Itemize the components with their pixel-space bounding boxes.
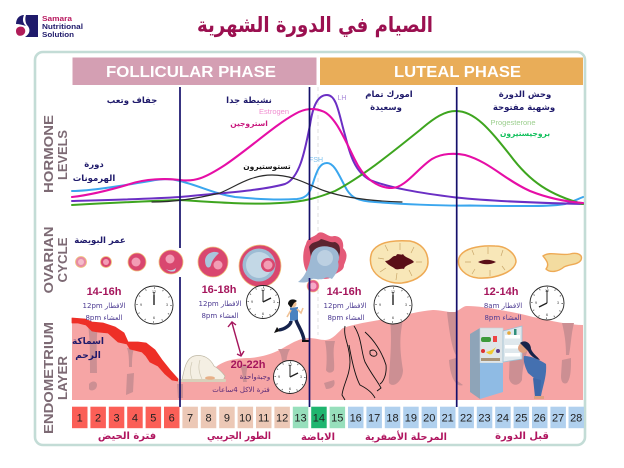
day strip: 13 [294, 412, 307, 424]
hormone and mood labels [72, 90, 555, 361]
clock: 8:00 [530, 286, 564, 320]
fasting window: late luteal: العشاء 8pm [484, 314, 522, 322]
hormone and mood labels: وحش الدورة [499, 90, 551, 100]
clock: 8:00: 9 [535, 301, 537, 305]
hormone and mood labels: بروجيستيرون [500, 129, 550, 138]
hormone and mood labels: وشهية مفتوحة [493, 103, 555, 113]
icon: pregnant woman line art [342, 326, 386, 400]
clock: 2:00 one meal: 3 [300, 375, 302, 379]
axis label: endometrium layer: ENDOMETRIUM [41, 322, 56, 434]
menstrual bleeding [72, 318, 178, 381]
fasting window: late luteal: 12-14h [484, 286, 519, 298]
clock: 2:00 one meal: 6 [289, 387, 291, 391]
logo: Samara Nutritional Solution: Samara [42, 14, 73, 23]
fasting window: days 1-6: الافطار 12pm [83, 302, 126, 310]
fasting window: late luteal [484, 286, 522, 322]
phase name labels: فترة الحيض [98, 431, 156, 442]
clock: 8:00: 12 [545, 289, 549, 293]
phase name labels: الطور الجريبي [207, 431, 271, 442]
day strip: 26 [534, 412, 546, 424]
day strip: 11 [258, 412, 269, 424]
hormone and mood labels: Estrogen [259, 107, 289, 116]
heading: luteal phase: LUTEAL PHASE [394, 64, 521, 81]
fasting window: ovulation: العشاء 8pm [327, 314, 365, 322]
axis label: ovarian cycle [41, 226, 70, 294]
clock: 12:00 ovulation: 9 [379, 303, 381, 307]
day strip: 28 [570, 412, 582, 424]
icon: woman looking in fridge [518, 341, 546, 399]
hormone and mood labels: استروجين [230, 119, 268, 128]
hormone and mood labels: FSH [309, 157, 323, 164]
hormone and mood labels: LH [338, 95, 346, 102]
dashed ovulation guide [317, 87, 319, 335]
double arrow between fasting windows [228, 322, 244, 356]
clock: 12:00: 12 [152, 290, 156, 294]
day strip: 27 [552, 412, 564, 424]
curve: LH [72, 95, 583, 204]
phase name labels: قبل الدورة [495, 431, 549, 442]
heading: follicular phase: FOLLICULAR PHASE [106, 64, 276, 81]
axis label: hormone levels: LEVELS [55, 130, 70, 180]
day strip: 3 [113, 412, 120, 424]
hormone and mood labels: عمر البويضة [74, 236, 126, 246]
fasting window: one meal: فترة الاكل 4ساعات [212, 386, 270, 394]
clock: 2:00: 12 [261, 288, 265, 292]
day strip: 25 [515, 412, 527, 424]
phase divider lines [180, 87, 457, 407]
hormone and mood labels: جفاف وتعب [107, 96, 157, 106]
curve: progesterone [72, 111, 583, 205]
logo: Samara Nutritional Solution [16, 14, 83, 39]
axis label: endometrium layer [41, 322, 70, 434]
day strip: 22 [460, 412, 472, 424]
day strip: 17 [368, 412, 380, 424]
curve: estrogen [72, 109, 583, 203]
ovarian follicles [76, 245, 281, 287]
day strip: 12 [276, 412, 288, 424]
fasting window: one meal: وجبةواحدة [240, 373, 270, 381]
phase name labels: الاباضة [301, 432, 335, 443]
day strip: 1 [77, 412, 83, 424]
fasting window: days 7-12: 16-18h [202, 284, 237, 296]
clock: 2:00 one meal: 12 [288, 363, 292, 367]
axis label: endometrium layer: LAYER [55, 355, 70, 400]
phase name labels [98, 430, 549, 443]
regressing corpus luteum [458, 246, 516, 278]
icon: running woman [274, 299, 309, 342]
fasting window: days 1-6: العشاء 8pm [85, 314, 123, 322]
heading: luteal phase [320, 58, 583, 85]
clock: 12:00 ovulation [374, 286, 412, 324]
hormone and mood labels: Progesterone [490, 118, 536, 127]
clock: 12:00: 6 [153, 316, 155, 320]
endometrial crypts [88, 312, 574, 398]
hormone and mood labels: الرحم [75, 351, 101, 361]
icon: open fridge [470, 326, 522, 399]
day strip: 23 [478, 412, 491, 424]
fasting window: late luteal: الافطار 8am [484, 302, 522, 310]
endometrium layer [72, 306, 583, 400]
clock: 12:00 [135, 286, 173, 324]
logo: Samara Nutritional Solution: Nutritional [42, 22, 83, 31]
hormone and mood labels: نشيطة جدا [226, 96, 272, 106]
day strip: 18 [386, 412, 399, 424]
hormone and mood labels: وسعيدة [370, 103, 402, 113]
day strip: 7 [187, 412, 193, 424]
day strip: 9 [224, 412, 230, 424]
fasting window: ovulation: الافطار 12pm [324, 302, 367, 310]
clock: 12:00 ovulation: 12 [391, 290, 395, 294]
clock: 8:00: 6 [546, 313, 548, 317]
phase name labels: المرحلة الأصفرية [365, 430, 447, 443]
clock: 2:00: 9 [251, 300, 253, 304]
day strip [72, 407, 584, 428]
axis label: hormone levels [41, 115, 70, 193]
clock: 2:00 one meal [274, 360, 306, 394]
ruptured follicle releasing egg [298, 232, 347, 292]
fasting window: days 7-12: الافطار 12pm [199, 300, 242, 308]
hormone and mood labels: الهرمونات [73, 174, 115, 184]
heading: follicular phase [72, 58, 316, 85]
axis label: ovarian cycle: CYCLE [55, 237, 70, 282]
day strip: 24 [497, 412, 509, 424]
clock: 12:00 ovulation: 3 [405, 303, 407, 307]
day strip: 20 [423, 412, 435, 424]
title: الصيام في الدورة الشهرية [197, 13, 433, 37]
corpus albicans [543, 253, 581, 271]
fasting window: one meal: 20-22h [231, 359, 266, 371]
corpus luteum [370, 241, 428, 283]
day strip: 14 [313, 412, 325, 424]
clock: 2:00: 6 [262, 312, 264, 316]
clock: 2:00: 3 [273, 300, 275, 304]
day strip: 6 [169, 412, 175, 424]
day strip: 10 [239, 412, 251, 424]
fasting window: one meal [212, 359, 270, 394]
fasting window: days 1-6: 14-16h [87, 286, 122, 298]
fasting window: days 7-12: العشاء 8pm [201, 312, 239, 320]
clock: 12:00: 9 [140, 303, 142, 307]
day strip: 16 [350, 412, 362, 424]
axis label: ovarian cycle: OVARIAN [41, 226, 56, 294]
hormone and mood labels: اسماكة [72, 337, 104, 347]
day strip: 5 [150, 412, 156, 424]
day strip: 15 [331, 412, 343, 424]
day strip: 8 [205, 412, 212, 424]
fasting window: days 7-12 [199, 284, 242, 320]
logo: Samara Nutritional Solution: Solution [42, 30, 74, 39]
panel: cycle chart border [35, 52, 585, 445]
fasting window: ovulation: 14-16h [327, 286, 362, 298]
clock: 12:00: 3 [166, 303, 168, 307]
fasting window: ovulation [324, 286, 367, 322]
clock: 2:00 one meal: 9 [278, 375, 280, 379]
clock: 12:00 ovulation: 6 [392, 316, 394, 320]
fasting window: days 1-6 [83, 286, 126, 322]
day strip: 21 [442, 412, 454, 424]
hormone and mood labels: دورة [84, 160, 104, 170]
day strip: 4 [132, 412, 138, 424]
day strip: 2 [95, 412, 101, 424]
hormone and mood labels: امورك تمام [365, 90, 413, 100]
curve: FSH [72, 163, 583, 206]
axis label: hormone levels: HORMONE [41, 115, 56, 193]
clock: 8:00: 3 [557, 301, 559, 305]
clock: 2:00 [246, 286, 280, 318]
hormone and mood labels: تستوستيرون [243, 162, 291, 171]
curve: testosterone [152, 175, 402, 202]
hormone level curves [72, 95, 583, 206]
icon: woman prostrating [178, 355, 226, 382]
day strip: 19 [405, 412, 417, 424]
